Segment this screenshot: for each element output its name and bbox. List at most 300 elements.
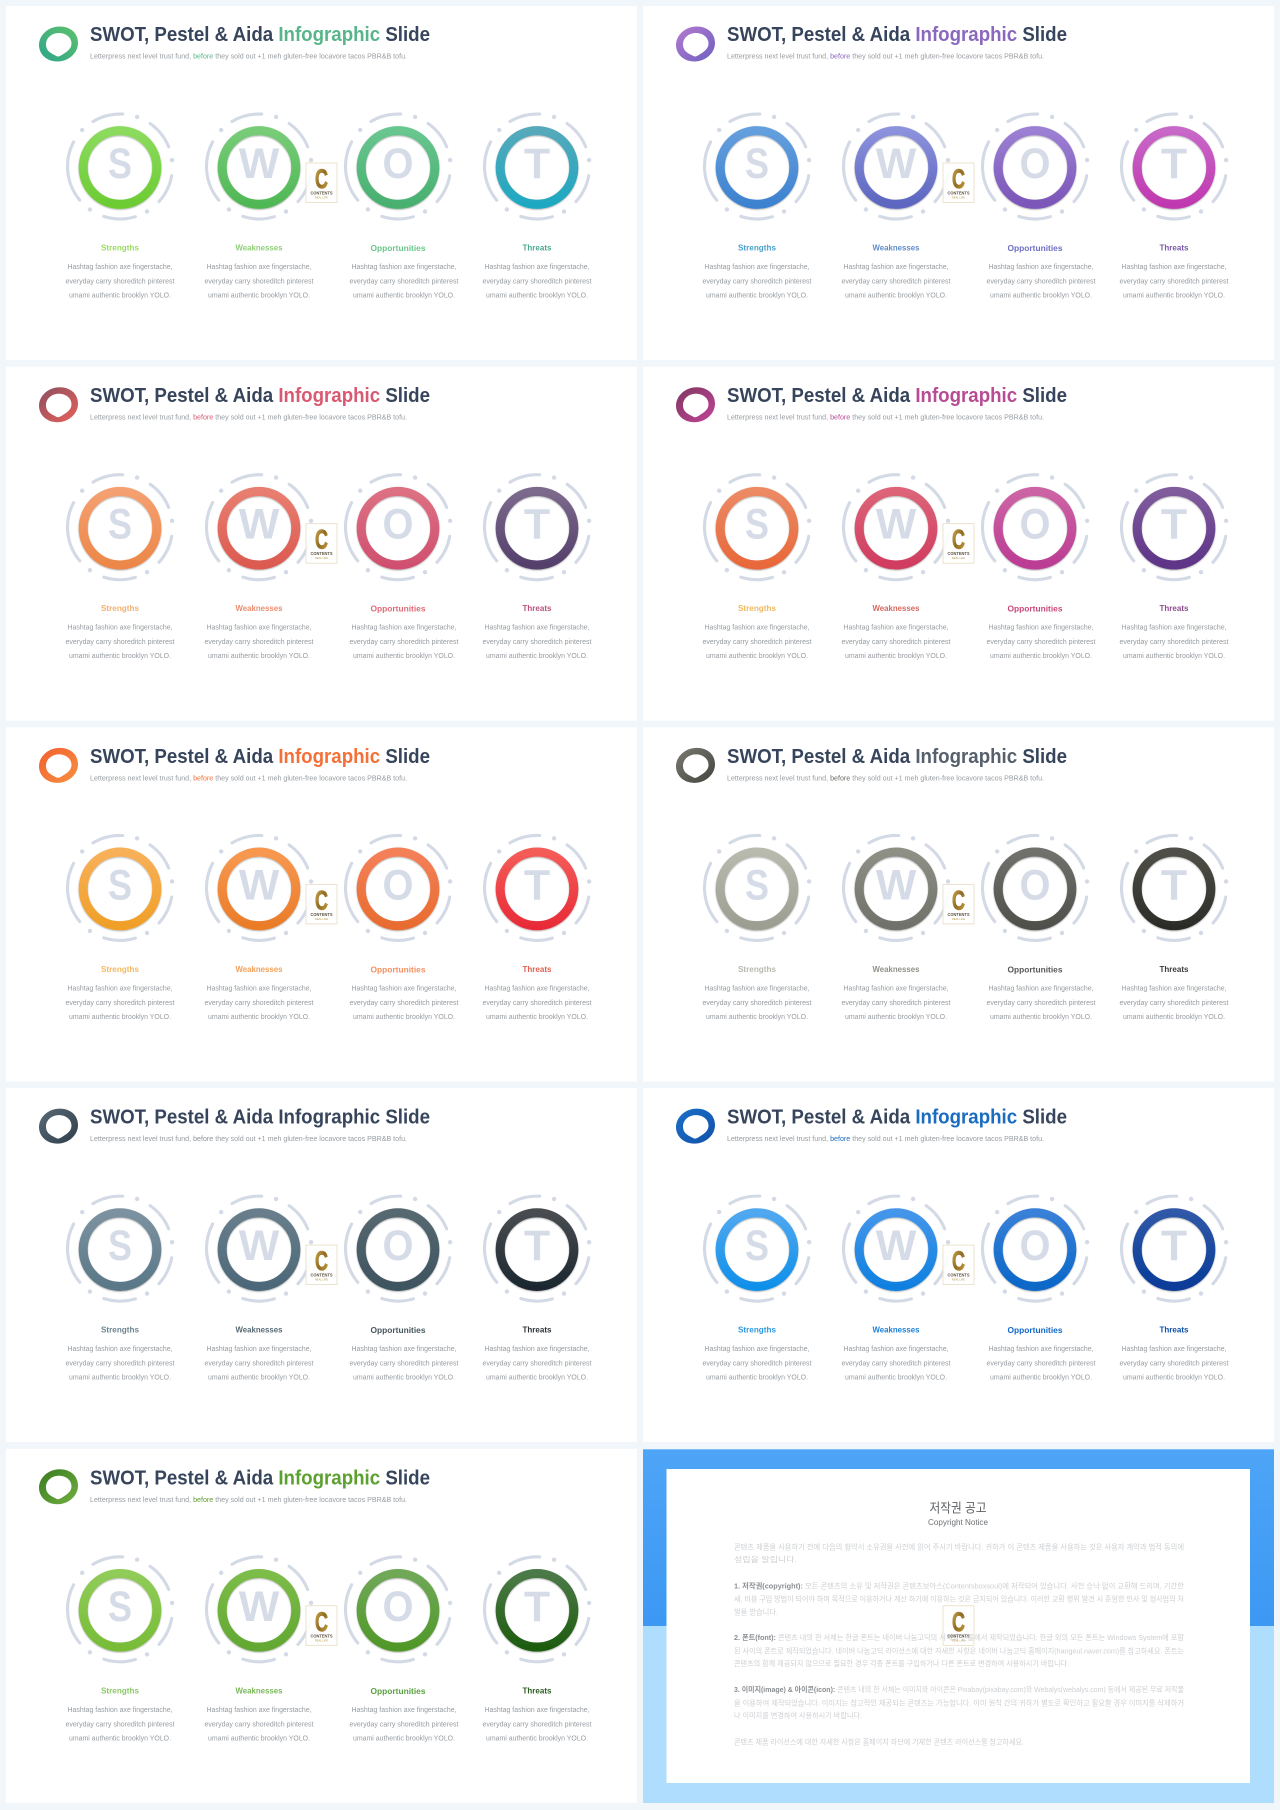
title: SWOT, Pestel & Aida Infographic Slide [90, 745, 430, 768]
watermark badge: CONTENTS [948, 1273, 970, 1278]
description [350, 985, 459, 1021]
ring: S [68, 835, 174, 940]
ring: W: W [876, 501, 917, 549]
ring: O [346, 1196, 452, 1301]
description: Hashtag fashion axe fingerstache, [206, 985, 312, 992]
column: Threats [1120, 475, 1229, 660]
watermark badge [943, 884, 974, 924]
label: Threats: Threats [1160, 603, 1189, 613]
description: everyday carry shoreditch pinterest [204, 1361, 314, 1368]
notice section 2: 2. 폰트(font): 콘텐츠 내의 한 서체는 한글 폰트는 네이버 나눔고딕의 서체와 산돌에서 제작되었습니다. 한글 외의 모든 폰트는 Windows System에 포함 [734, 1633, 1184, 1642]
description: everyday carry shoreditch pinterest [482, 278, 592, 286]
column: Opportunities [346, 1196, 459, 1382]
column: Threats [482, 114, 592, 300]
description [482, 625, 592, 660]
subtitle: Letterpress next level trust fund, before they sold out +1 meh gluten-free locavore tacos PBR&B tofu. [90, 775, 407, 782]
ring: T: T [1161, 501, 1187, 549]
description [702, 1346, 812, 1382]
label: Threats: Threats [522, 242, 552, 252]
ring: O [983, 835, 1089, 940]
description: umami authentic brooklyn YOLO. [353, 292, 455, 300]
icon: header blob [676, 1109, 715, 1144]
watermark badge: C [315, 164, 328, 194]
description: everyday carry shoreditch pinterest [1120, 1000, 1229, 1007]
description [986, 1346, 1096, 1382]
description [482, 264, 592, 300]
watermark badge: C [315, 525, 328, 555]
label: Threats: Threats [522, 964, 552, 974]
description: umami authentic brooklyn YOLO. [845, 292, 947, 300]
subtitle: Letterpress next level trust fund, before they sold out +1 meh gluten-free locavore tacos PBR&B tofu. [727, 54, 1044, 60]
description: Hashtag fashion axe fingerstache, [484, 264, 590, 271]
notice intro: 콘텐츠 제품을 사용하기 전에 다음의 협약서 소유권을 사전에 읽어 주시기 바랍니다. 귀하가 이 콘텐츠 제품을 사용하는 것은 사용자 계약과 법적 동의에 [734, 1542, 1184, 1552]
notice section 1: 벌을 받습니다. [734, 1608, 778, 1616]
description: everyday carry shoreditch pinterest [842, 1000, 951, 1007]
column: Opportunities [346, 114, 459, 300]
label: Weaknesses: Weaknesses [872, 964, 920, 974]
ring: S: S [745, 140, 769, 188]
description: everyday carry shoreditch pinterest [482, 639, 592, 646]
description: everyday carry shoreditch pinterest [986, 639, 1096, 646]
description: umami authentic brooklyn YOLO. [69, 1014, 171, 1021]
label: Opportunities: Opportunities [370, 604, 426, 614]
description: Hashtag fashion axe fingerstache, [844, 264, 949, 271]
ring: S: S [108, 140, 132, 188]
description: everyday carry shoreditch pinterest [66, 1361, 175, 1368]
column: Strengths [66, 475, 175, 660]
watermark badge: C [952, 164, 965, 194]
ring: T: T [1161, 861, 1187, 909]
ring: W: W [239, 861, 280, 909]
ring: T [485, 114, 591, 219]
column: Weaknesses [204, 1557, 314, 1742]
watermark badge: CONTENTS [948, 1633, 970, 1638]
description: Hashtag fashion axe fingerstache, [704, 1346, 810, 1353]
column: Threats [482, 1557, 592, 1742]
column: Weaknesses [842, 475, 951, 660]
ring: O [346, 835, 452, 940]
description: Hashtag fashion axe fingerstache, [704, 625, 810, 632]
description: everyday carry shoreditch pinterest [350, 1000, 459, 1007]
ring: W [844, 114, 950, 219]
notice closing line: 콘텐츠 제품 라이선스에 대한 자세한 사항은 홈페이지 하단에 기재한 콘텐츠 라이선스를 참고하세요. [734, 1738, 1024, 1746]
label: Threats: Threats [1160, 964, 1189, 974]
watermark badge [306, 1245, 337, 1285]
description [1120, 625, 1229, 660]
watermark badge: REAL LIFE [315, 556, 328, 560]
description: everyday carry shoreditch pinterest [350, 1721, 459, 1728]
ring: S: S [108, 501, 132, 549]
watermark badge: REAL LIFE [315, 917, 328, 921]
ring: T [1122, 114, 1228, 219]
watermark badge: C [952, 1246, 965, 1276]
description: umami authentic brooklyn YOLO. [208, 1735, 310, 1742]
watermark badge: REAL LIFE [952, 556, 965, 560]
description: Hashtag fashion axe fingerstache, [988, 985, 1094, 992]
subtitle: Letterpress next level trust fund, before they sold out +1 meh gluten-free locavore tacos PBR&B tofu. [90, 54, 407, 60]
watermark badge [943, 524, 974, 563]
watermark badge: CONTENTS [948, 190, 970, 196]
description [66, 1346, 175, 1382]
title: SWOT, Pestel & Aida Infographic Slide [727, 23, 1067, 46]
description: umami authentic brooklyn YOLO. [486, 1735, 588, 1742]
column: Threats [482, 1196, 592, 1382]
description: everyday carry shoreditch pinterest [986, 1000, 1096, 1007]
watermark badge: CONTENTS [310, 1273, 332, 1278]
icon: header blob [676, 387, 715, 422]
description: Hashtag fashion axe fingerstache, [484, 985, 590, 992]
watermark badge: REAL LIFE [952, 1278, 965, 1282]
watermark badge: REAL LIFE [315, 1638, 328, 1642]
description: Hashtag fashion axe fingerstache, [1122, 985, 1227, 992]
description: everyday carry shoreditch pinterest [1120, 639, 1229, 646]
ring: W: W [239, 501, 280, 549]
description: umami authentic brooklyn YOLO. [69, 653, 171, 660]
description: everyday carry shoreditch pinterest [986, 1361, 1096, 1368]
ring: O: O [1020, 861, 1050, 909]
description: everyday carry shoreditch pinterest [1120, 1361, 1229, 1368]
ring: S [705, 114, 811, 219]
title: SWOT, Pestel & Aida Infographic Slide [90, 1466, 430, 1489]
label: Strengths: Strengths [738, 964, 776, 974]
description: umami authentic brooklyn YOLO. [845, 653, 947, 660]
label: Opportunities: Opportunities [370, 243, 426, 253]
ring: S [705, 1196, 811, 1301]
ring: O [983, 1196, 1089, 1301]
description: umami authentic brooklyn YOLO. [353, 1375, 455, 1382]
column: Strengths [702, 114, 812, 300]
ring: W [207, 1196, 313, 1301]
description: Hashtag fashion axe fingerstache, [484, 1346, 590, 1353]
description: Hashtag fashion axe fingerstache, [988, 264, 1094, 271]
ring: W [207, 114, 313, 219]
ring: S: S [108, 1222, 132, 1270]
subtitle: Letterpress next level trust fund, before they sold out +1 meh gluten-free locavore tacos PBR&B tofu. [90, 415, 407, 422]
icon: header blob [676, 26, 715, 62]
description: Hashtag fashion axe fingerstache, [988, 625, 1094, 632]
label: Weaknesses: Weaknesses [872, 603, 920, 613]
label: Strengths: Strengths [101, 1325, 139, 1335]
watermark badge: REAL LIFE [952, 1638, 965, 1642]
description: umami authentic brooklyn YOLO. [1123, 653, 1225, 660]
panel: copyright notice [643, 1449, 1274, 1803]
description: umami authentic brooklyn YOLO. [706, 292, 808, 300]
description: umami authentic brooklyn YOLO. [845, 1014, 947, 1021]
description [66, 1707, 175, 1742]
description: everyday carry shoreditch pinterest [702, 639, 812, 646]
description [1120, 1346, 1229, 1382]
column: Strengths [702, 835, 812, 1021]
description: umami authentic brooklyn YOLO. [990, 292, 1092, 300]
ring: O: O [382, 140, 414, 188]
label: Strengths: Strengths [738, 1325, 776, 1335]
notice section 3: 3. 이미지(image) & 아이콘(icon): 콘텐츠 내의 한 서체는 이미지와 아이콘은 Pixabay(pixabay.com)와 Webalys(webalys.com) 등에서 제공된 무료 저작물 [734, 1685, 1184, 1694]
label: Weaknesses: Weaknesses [872, 1325, 920, 1335]
ring: T: T [1161, 140, 1187, 188]
ring: T [485, 835, 591, 940]
description: Hashtag fashion axe fingerstache, [1122, 1346, 1227, 1353]
description: umami authentic brooklyn YOLO. [486, 1014, 588, 1021]
label: Strengths: Strengths [101, 603, 139, 613]
description: everyday carry shoreditch pinterest [702, 278, 812, 286]
panel: orange SWOT slide [6, 727, 637, 1081]
description: Hashtag fashion axe fingerstache, [352, 1707, 457, 1714]
ring: T [1122, 835, 1228, 940]
description: umami authentic brooklyn YOLO. [1123, 1375, 1225, 1382]
watermark badge: CONTENTS [310, 912, 332, 917]
notice section 2: 콘텐츠의 함께 제공되지 않으므로 필요한 경우 각종 폰트를 구입하거나 다른 폰트로 변경하여 사용하시기 바랍니다. [734, 1659, 1069, 1668]
description [702, 625, 812, 660]
description: everyday carry shoreditch pinterest [204, 639, 314, 646]
ring: O [983, 114, 1089, 219]
ring: W: W [876, 1222, 917, 1270]
column: Opportunities [983, 114, 1096, 300]
description [986, 985, 1096, 1021]
description: umami authentic brooklyn YOLO. [208, 1014, 310, 1021]
notice intro: 성립을 알립니다. [734, 1555, 797, 1564]
column: Weaknesses [842, 1196, 951, 1382]
description: umami authentic brooklyn YOLO. [353, 653, 455, 660]
description: everyday carry shoreditch pinterest [350, 1361, 459, 1368]
icon: header blob [39, 26, 78, 62]
column: Strengths [66, 1557, 175, 1742]
description: umami authentic brooklyn YOLO. [990, 1375, 1092, 1382]
description: Hashtag fashion axe fingerstache, [844, 985, 949, 992]
ring: T: T [524, 501, 550, 549]
description [986, 264, 1096, 300]
ring: T: T [524, 1222, 550, 1270]
description: everyday carry shoreditch pinterest [204, 1000, 314, 1007]
description: Hashtag fashion axe fingerstache, [206, 1707, 312, 1714]
label: Opportunities: Opportunities [1008, 243, 1063, 253]
description: umami authentic brooklyn YOLO. [1123, 292, 1225, 300]
description: umami authentic brooklyn YOLO. [706, 1375, 808, 1382]
description [986, 625, 1096, 660]
column: Strengths [66, 114, 175, 300]
description: Hashtag fashion axe fingerstache, [484, 1707, 590, 1714]
label: Strengths: Strengths [738, 603, 776, 613]
description: everyday carry shoreditch pinterest [66, 639, 175, 646]
title: SWOT, Pestel & Aida Infographic Slide [727, 745, 1067, 768]
description [482, 1707, 592, 1742]
panel: slate SWOT slide [6, 1088, 637, 1442]
description: everyday carry shoreditch pinterest [842, 278, 951, 286]
description: everyday carry shoreditch pinterest [66, 1000, 175, 1007]
ring: S [68, 114, 174, 219]
ring: O: O [1020, 140, 1050, 188]
watermark badge: REAL LIFE [952, 917, 965, 921]
description [350, 625, 459, 660]
ring: T [485, 475, 591, 580]
description: Hashtag fashion axe fingerstache, [1122, 625, 1227, 632]
description: everyday carry shoreditch pinterest [482, 1361, 592, 1368]
panel: green SWOT slide [6, 6, 637, 360]
description: everyday carry shoreditch pinterest [842, 639, 951, 646]
watermark badge [943, 1606, 974, 1645]
description [702, 985, 812, 1021]
description: umami authentic brooklyn YOLO. [706, 653, 808, 660]
notice section 3: 나 이미지를 변경하여 사용하시기 바랍니다. [734, 1711, 862, 1720]
icon: header blob [39, 748, 78, 783]
column: Weaknesses [204, 835, 314, 1021]
watermark badge: CONTENTS [948, 912, 970, 917]
column: Opportunities [983, 1196, 1096, 1382]
panel: magenta SWOT slide [643, 367, 1274, 721]
description: umami authentic brooklyn YOLO. [353, 1014, 455, 1021]
description: Hashtag fashion axe fingerstache, [988, 1346, 1094, 1353]
description [350, 264, 459, 300]
label: Weaknesses: Weaknesses [236, 242, 283, 252]
description [66, 985, 175, 1021]
watermark badge: REAL LIFE [952, 196, 965, 200]
ring: W [207, 835, 313, 940]
label: Opportunities: Opportunities [1008, 1325, 1063, 1335]
description [204, 1346, 314, 1382]
description: everyday carry shoreditch pinterest [482, 1721, 592, 1728]
watermark badge: CONTENTS [310, 551, 332, 556]
ring: S [68, 1557, 174, 1662]
label: Threats: Threats [522, 1685, 552, 1695]
description: Hashtag fashion axe fingerstache, [352, 625, 457, 632]
ring: S [705, 475, 811, 580]
column: Threats [482, 475, 592, 660]
ring: S: S [745, 1222, 769, 1270]
watermark badge: CONTENTS [310, 190, 332, 196]
ring: T: T [524, 1583, 550, 1631]
description: umami authentic brooklyn YOLO. [69, 1375, 171, 1382]
title: SWOT, Pestel & Aida Infographic Slide [90, 1106, 430, 1129]
ring: S: S [108, 861, 132, 909]
icon: header blob [39, 1109, 78, 1144]
column: Strengths [702, 1196, 812, 1382]
description: Hashtag fashion axe fingerstache, [68, 1346, 173, 1353]
description: everyday carry shoreditch pinterest [842, 1361, 951, 1368]
ring: O [983, 475, 1089, 580]
description [1120, 264, 1229, 300]
ring: O: O [1020, 501, 1050, 549]
column: Opportunities [983, 475, 1096, 660]
watermark badge: C [952, 885, 965, 915]
ring: S: S [745, 861, 769, 909]
description: Hashtag fashion axe fingerstache, [352, 264, 457, 271]
description: umami authentic brooklyn YOLO. [990, 1014, 1092, 1021]
column: Threats [1120, 835, 1229, 1021]
watermark badge: CONTENTS [310, 1633, 332, 1638]
label: Weaknesses: Weaknesses [236, 1325, 283, 1335]
description [204, 264, 314, 300]
description [204, 1707, 314, 1742]
description: Hashtag fashion axe fingerstache, [206, 625, 312, 632]
label: Threats: Threats [522, 603, 552, 613]
label: Weaknesses: Weaknesses [236, 603, 283, 613]
description: everyday carry shoreditch pinterest [204, 1721, 314, 1728]
watermark badge: C [952, 1607, 965, 1637]
column: Weaknesses [204, 1196, 314, 1382]
description: everyday carry shoreditch pinterest [986, 278, 1096, 286]
description [482, 985, 592, 1021]
notice heading: 저작권 공고 [930, 1500, 987, 1516]
column: Opportunities [346, 475, 459, 660]
watermark badge [943, 1245, 974, 1285]
description [204, 985, 314, 1021]
notice section 1: 1. 저작권(copyright): 모든 콘텐츠의 소유 및 저작권은 콘텐츠보아스(Contentsboxsoul)에 저작되어 있습니다. 사전 승낙 없이 교환해 드리며, 기간한 [734, 1582, 1184, 1590]
column: Weaknesses [842, 835, 951, 1021]
description [66, 625, 175, 660]
ring: W [207, 1557, 313, 1662]
ring: W: W [876, 140, 917, 188]
description: Hashtag fashion axe fingerstache, [68, 264, 173, 271]
notice section 3 [734, 1685, 1184, 1720]
watermark badge: REAL LIFE [315, 1278, 328, 1282]
label: Opportunities: Opportunities [1008, 964, 1063, 974]
subtitle: Letterpress next level trust fund, before they sold out +1 meh gluten-free locavore tacos PBR&B tofu. [727, 415, 1044, 422]
label: Weaknesses: Weaknesses [236, 964, 283, 974]
label: Opportunities: Opportunities [370, 1325, 426, 1335]
watermark badge [306, 524, 337, 563]
description: everyday carry shoreditch pinterest [350, 639, 459, 646]
notice subheading: Copyright Notice [928, 1517, 988, 1527]
watermark badge [943, 163, 974, 202]
description [350, 1707, 459, 1742]
notice section 1: 세, 비용 구입 방법이 되어야 하며 목적으로 이용하거나 계산 하기에 이용하는 것은 금지되어 있습니다. 이러한 교환 행위 발견 시 준엄한 민사 및 형사법의 처 [734, 1594, 1184, 1604]
watermark badge [306, 884, 337, 924]
description: umami authentic brooklyn YOLO. [353, 1735, 455, 1742]
description: everyday carry shoreditch pinterest [204, 278, 314, 286]
description [66, 264, 175, 300]
notice section 1 [734, 1582, 1184, 1616]
ring: W: W [239, 140, 280, 188]
label: Opportunities: Opportunities [370, 964, 426, 974]
ring: S [68, 475, 174, 580]
description [842, 264, 951, 300]
description: Hashtag fashion axe fingerstache, [844, 1346, 949, 1353]
description: umami authentic brooklyn YOLO. [69, 292, 171, 300]
description: Hashtag fashion axe fingerstache, [704, 985, 810, 992]
description: Hashtag fashion axe fingerstache, [484, 625, 590, 632]
title: SWOT, Pestel & Aida Infographic Slide [90, 23, 430, 46]
subtitle: Letterpress next level trust fund, before they sold out +1 meh gluten-free locavore tacos PBR&B tofu. [90, 1136, 407, 1143]
panel: grey SWOT slide [643, 727, 1274, 1081]
subtitle: Letterpress next level trust fund, before they sold out +1 meh gluten-free locavore tacos PBR&B tofu. [90, 1497, 407, 1504]
description [842, 625, 951, 660]
ring: W [207, 475, 313, 580]
ring: T [1122, 475, 1228, 580]
column: Weaknesses [204, 475, 314, 660]
panel: purple SWOT slide [643, 6, 1274, 360]
ring: S [68, 1196, 174, 1301]
ring: O: O [382, 1222, 414, 1270]
label: Opportunities: Opportunities [1008, 604, 1063, 614]
description: everyday carry shoreditch pinterest [702, 1361, 812, 1368]
ring: W: W [239, 1583, 280, 1631]
description: umami authentic brooklyn YOLO. [486, 1375, 588, 1382]
column: Weaknesses [842, 114, 951, 300]
ring: T: T [524, 861, 550, 909]
ring: W [844, 475, 950, 580]
description: umami authentic brooklyn YOLO. [208, 292, 310, 300]
description: Hashtag fashion axe fingerstache, [1122, 264, 1227, 271]
subtitle: Letterpress next level trust fund, before they sold out +1 meh gluten-free locavore tacos PBR&B tofu. [727, 775, 1044, 782]
title: SWOT, Pestel & Aida Infographic Slide [727, 384, 1067, 407]
notice section 2: 된 사이의 폰트로 제작되었습니다. 네이버 나눔고딕 라이선스에 대한 자세한 사항은 네이버 나눔고딕 홈페이지(hangeul.naver.com)를 참고하세요. 폰트는 [734, 1646, 1184, 1656]
description: Hashtag fashion axe fingerstache, [206, 264, 312, 271]
label: Opportunities: Opportunities [370, 1686, 426, 1696]
subtitle: Letterpress next level trust fund, before they sold out +1 meh gluten-free locavore tacos PBR&B tofu. [727, 1136, 1044, 1143]
column: Weaknesses [204, 114, 314, 300]
description: Hashtag fashion axe fingerstache, [68, 985, 173, 992]
description [1120, 985, 1229, 1021]
description: Hashtag fashion axe fingerstache, [704, 264, 810, 271]
